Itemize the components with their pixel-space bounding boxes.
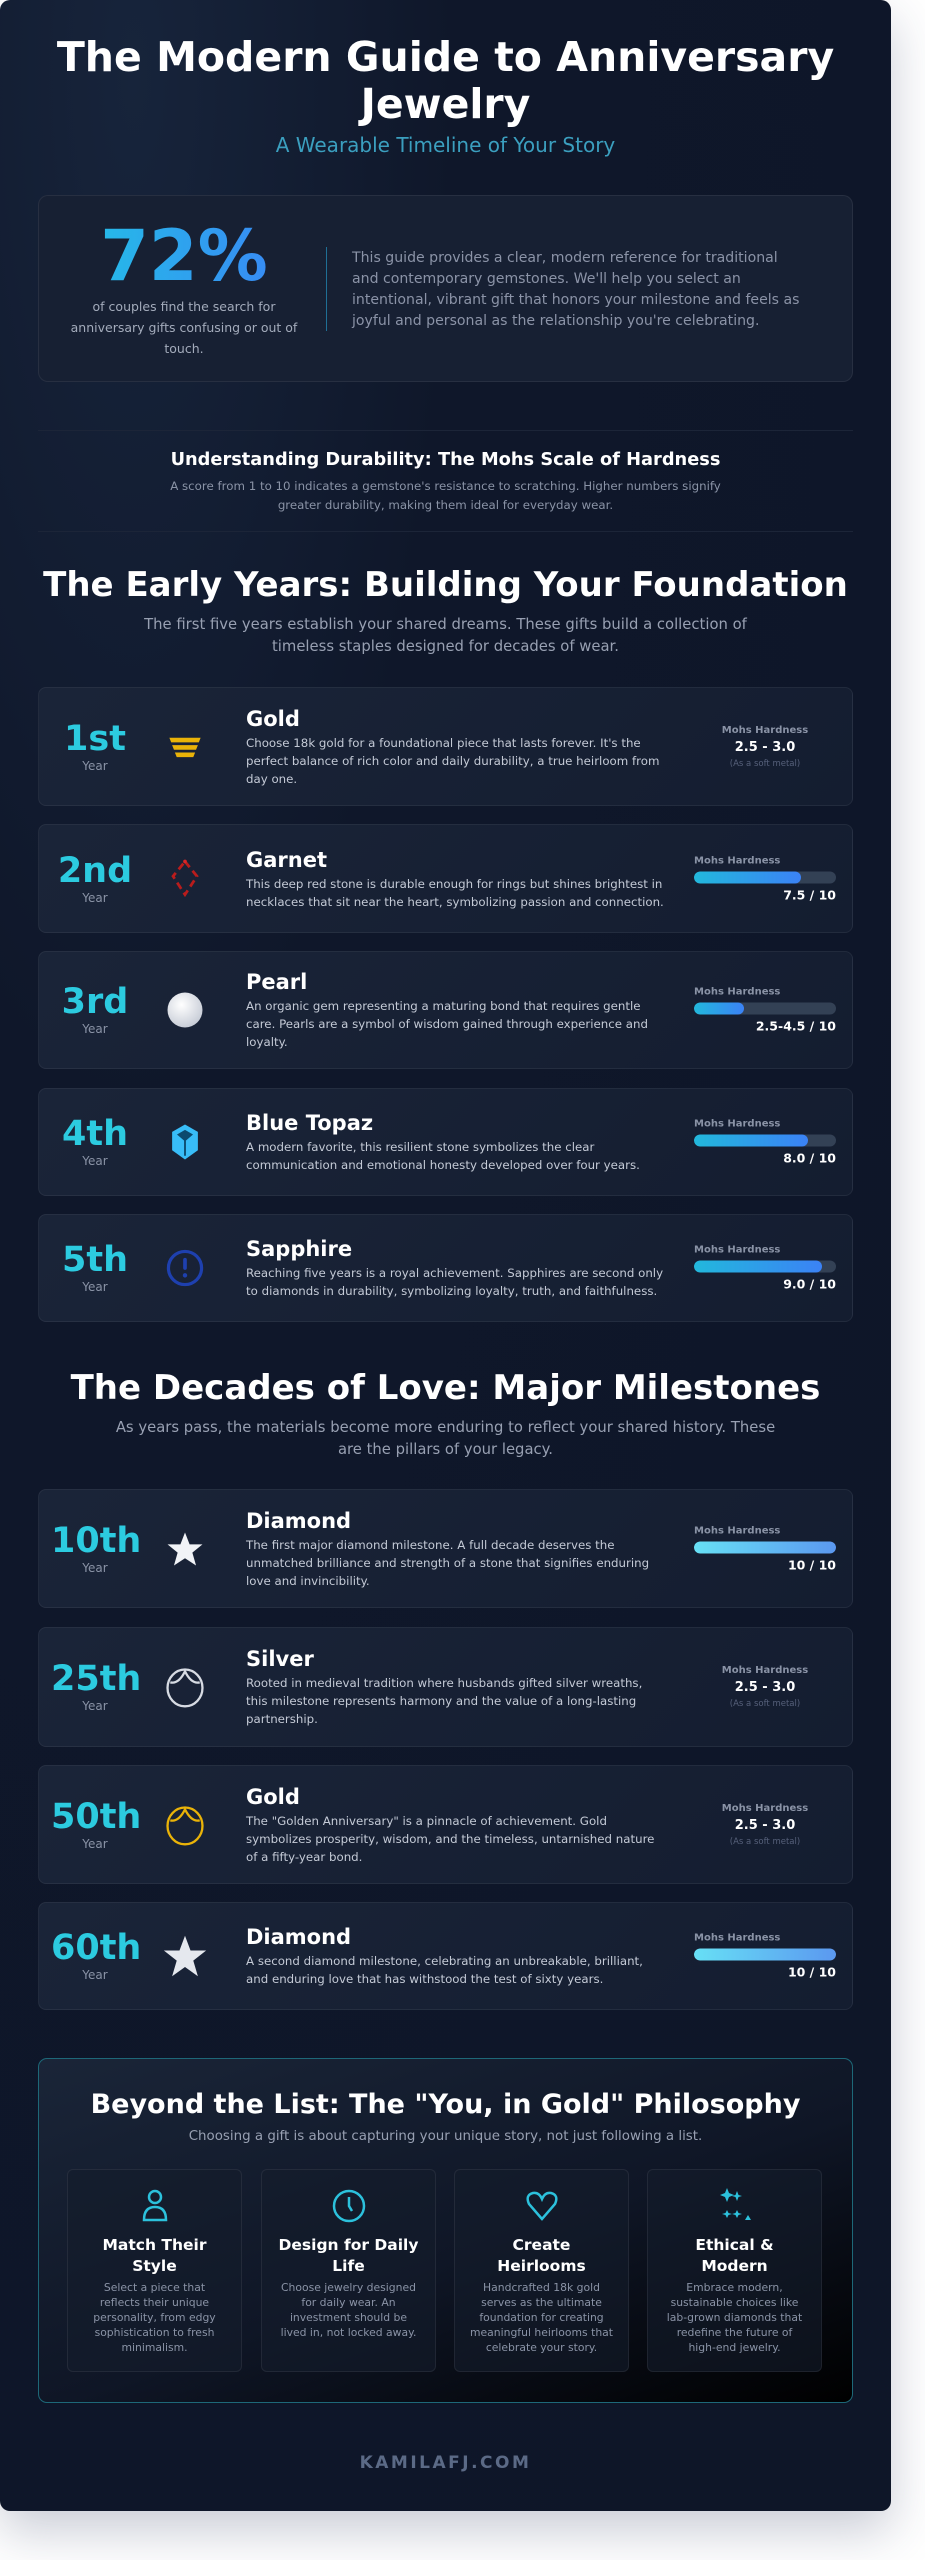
card: 1st gold: day one. (246, 772, 297, 786)
card: 3rd pearl: Pearl (246, 970, 307, 994)
subtitle: A Wearable Timeline of Your Story (276, 133, 615, 157)
card: 60th diamond: 10 / 10 (788, 1964, 836, 1980)
card: 4th blue topaz: Mohs Hardness (694, 1118, 780, 1130)
card: daily life: Design for Daily Life (279, 2236, 418, 2275)
card: match style (67, 2169, 242, 2372)
card: 25th silver: Silver (246, 1647, 314, 1671)
card: heirlooms: Handcrafted 18k gold (483, 2281, 600, 2294)
card: 2nd garnet: This deep red stone is durable enough for rings but shines brightest in (246, 876, 662, 890)
panel: philosophy (38, 2058, 853, 2403)
stat number (61, 214, 307, 298)
card: 4th blue topaz: communication and emotional honesty developed over four years. (246, 1158, 640, 1172)
card: 25th silver: 2.5 - 3.0 (735, 1680, 795, 1695)
card: 60th diamond: 60th (51, 1928, 141, 1968)
card: 1st gold (38, 687, 853, 806)
heading: early years: The Early Years: Building Your Foundation (43, 565, 848, 605)
card: 10th diamond: Diamond (246, 1508, 351, 1532)
card: match style: minimalism. (121, 2341, 188, 2354)
icon: sapphire (166, 1250, 204, 1286)
title (57, 33, 834, 128)
card: 3rd pearl (38, 951, 853, 1069)
card: 25th silver: this milestone represents harmony and the value of a long-lasting (246, 1694, 636, 1708)
intro text: intentional, vibrant gift that honors your milestone and feels as (352, 292, 799, 308)
card: ethical: sustainable choices like (671, 2296, 798, 2309)
card: 3rd pearl: An organic gem representing a maturing bond that requires gentle (246, 999, 641, 1013)
card: ethical: Embrace modern, (686, 2281, 783, 2294)
intro text: and contemporary gemstones. We'll help you select an (352, 271, 741, 287)
card: 5th sapphire (38, 1214, 853, 1322)
card: 5th sapphire: Sapphire (246, 1237, 352, 1261)
decades intro: are the pillars of your legacy. (338, 1441, 553, 1458)
card: 10th diamond: Year (82, 1560, 108, 1574)
card: 25th silver: Mohs Hardness (722, 1665, 808, 1676)
mohs explanation (170, 449, 721, 512)
card: 60th diamond: Year (82, 1968, 108, 1982)
intro text: joyful and personal as the relationship you're celebrating. (352, 313, 760, 329)
card: 1st gold: Choose 18k gold for a foundational piece that lasts forever. It's the (246, 736, 641, 750)
card: 2nd garnet: necklaces that sit near the heart, symbolizing passion and connection. (246, 894, 664, 908)
card: 1st gold: Year (82, 758, 108, 772)
card: 60th diamond: and enduring love that has withstood the test of sixty years. (246, 1972, 603, 1986)
title: Jewelry (361, 80, 530, 128)
philosophy title: Beyond the List: The "You, in Gold" Philosophy (91, 2089, 800, 2120)
early years intro: timeless staples designed for decades of wear. (272, 638, 619, 655)
early years intro: The first five years establish your shared dreams. These gifts build a collection of (144, 616, 747, 633)
card: 2nd garnet: Year (82, 890, 108, 904)
card: 10th diamond: unmatched brilliance and strength of a stone that signifies enduring (246, 1556, 649, 1570)
mohs explanation: greater durability, making them ideal for everyday wear. (278, 498, 613, 512)
card: 4th blue topaz (38, 1088, 853, 1196)
card: daily life: lived in, not locked away. (281, 2326, 416, 2339)
title: The Modern Guide to Anniversary (57, 33, 834, 81)
card: 50th gold: symbolizes prosperity, wisdom, and the timeless, untarnished nature (246, 1832, 654, 1846)
card: 1st gold: 1st (64, 718, 126, 758)
card: match style: reflects their unique (100, 2296, 209, 2309)
card: 5th sapphire: Year (82, 1280, 108, 1294)
card: heirlooms: foundation for creating (479, 2311, 604, 2324)
card: 60th diamond: A second diamond milestone, celebrating an unbreakable, brilliant, (246, 1954, 643, 1968)
card: 10th diamond: Mohs Hardness (694, 1525, 780, 1536)
card: 3rd pearl: loyalty. (246, 1035, 288, 1049)
icon: star (168, 1532, 202, 1566)
early years intro (144, 616, 748, 655)
card: daily life: Choose jewelry designed (281, 2281, 416, 2294)
card: 3rd pearl: care. Pearls are a symbol of wisdom gained through experience and (246, 1017, 648, 1031)
card: ethical: Ethical & Modern (695, 2236, 774, 2275)
icon: gold bars (169, 738, 201, 758)
card: 50th gold: Mohs Hardness (722, 1802, 808, 1814)
stat caption: of couples find the search for anniversary gifts confusing or out of touch. (71, 299, 297, 356)
heading: decades: The Decades of Love: Major Milestones (71, 1368, 820, 1408)
icon: silver ring (166, 1668, 204, 1708)
card: 1st gold: Mohs Hardness (722, 724, 808, 736)
card: heirlooms: Create Heirlooms (497, 2236, 586, 2275)
card: 4th blue topaz: 4th (62, 1114, 128, 1154)
card: daily life (261, 2169, 436, 2372)
card: 50th gold: Gold (246, 1784, 300, 1808)
mohs explanation: Understanding Durability: The Mohs Scale of Hardness (171, 449, 720, 470)
card: 25th silver: partnership. (246, 1712, 318, 1726)
card: 4th blue topaz: Blue Topaz (246, 1111, 373, 1135)
card: heirlooms: meaningful heirlooms that (470, 2326, 613, 2339)
card: 25th silver: Rooted in medieval tradition where husbands gifted silver wreaths, (246, 1676, 642, 1690)
card: daily life: for daily wear. An (301, 2296, 396, 2309)
card: 10th diamond: 10 / 10 (788, 1557, 836, 1572)
card: 60th diamond: Mohs Hardness (694, 1932, 780, 1944)
card: match style: sophistication to fresh (95, 2326, 214, 2339)
card: 25th silver (38, 1627, 853, 1747)
card: 3rd pearl: 3rd (62, 982, 128, 1022)
card: 1st gold: (As a soft metal) (730, 758, 800, 768)
card: ethical (647, 2169, 822, 2372)
card: heirlooms: serves as the ultimate (481, 2296, 602, 2309)
intro text: This guide provides a clear, modern reference for traditional (352, 250, 778, 266)
card: 25th silver: (As a soft metal) (730, 1699, 800, 1709)
card: 5th sapphire: to diamonds in durability, symbolizing loyalty, truth, and faithfulness. (246, 1284, 657, 1298)
card: daily life: investment should be (290, 2311, 407, 2324)
card: 60th diamond (38, 1902, 853, 2010)
card: 50th gold (38, 1765, 853, 1884)
mohs explanation: A score from 1 to 10 indicates a gemstone's resistance to scratching. Higher numbers signify (170, 479, 721, 493)
card: 4th blue topaz: Year (82, 1154, 108, 1168)
card: 10th diamond (38, 1489, 853, 1608)
card: 10th diamond: love and invincibility. (246, 1574, 370, 1588)
card: 10th diamond: The first major diamond milestone. A full decade deserves the (246, 1538, 614, 1552)
card: 3rd pearl: 2.5-4.5 / 10 (756, 1018, 836, 1034)
card: 1st gold: 2.5 - 3.0 (735, 740, 795, 754)
card: 5th sapphire: 5th (62, 1240, 128, 1280)
card: 50th gold: The "Golden Anniversary" is a pinnacle of achievement. Gold (246, 1814, 607, 1828)
card: 2nd garnet (38, 824, 853, 933)
card: 50th gold: of a fifty-year bond. (246, 1850, 362, 1864)
stat number: 72% (100, 215, 268, 297)
card: match style: Match Their Style (102, 2236, 206, 2275)
card: 2nd garnet: Mohs Hardness (694, 855, 780, 866)
card: 5th sapphire: Mohs Hardness (694, 1244, 780, 1256)
icon: gold ring (166, 1806, 204, 1846)
card: 25th silver: 25th (51, 1659, 141, 1699)
card: ethical: redefine the future of (677, 2326, 792, 2339)
card: ethical: lab-grown diamonds that (667, 2311, 802, 2324)
footer: KAMILAFJ.COM (360, 2453, 531, 2473)
card: 25th silver: Year (82, 1699, 108, 1713)
card: 50th gold: Year (82, 1836, 108, 1850)
intro text (352, 250, 799, 329)
card: 4th blue topaz: 8.0 / 10 (783, 1150, 836, 1166)
philosophy subtitle: Choosing a gift is about capturing your unique story, not just following a list. (189, 2129, 702, 2144)
card: ethical: high-end jewelry. (688, 2341, 781, 2354)
card: 50th gold: 2.5 - 3.0 (735, 1818, 795, 1832)
card: heirlooms (454, 2169, 629, 2372)
card: 1st gold: Gold (246, 706, 300, 730)
card: 60th diamond: Diamond (246, 1925, 351, 1949)
card: 10th diamond: 10th (51, 1520, 141, 1560)
card: 2nd garnet: 2nd (58, 850, 132, 890)
decades intro (116, 1419, 775, 1458)
card: 50th gold: 50th (51, 1796, 141, 1836)
icon: blue topaz (172, 1124, 198, 1160)
icon: large star (164, 1936, 206, 1976)
card: 5th sapphire: Reaching five years is a royal achievement. Sapphires are second only (246, 1266, 663, 1280)
card: 1st gold: perfect balance of rich color and daily durability, a true heirloom from (246, 754, 659, 768)
icon: garnet (171, 860, 199, 897)
card: heirlooms: celebrate your story. (486, 2341, 597, 2354)
card: match style: personality, from edgy (93, 2311, 216, 2324)
card: 5th sapphire: 9.0 / 10 (783, 1276, 836, 1292)
icon: pearl (168, 992, 202, 1028)
card: 3rd pearl: Mohs Hardness (694, 986, 780, 998)
card: 4th blue topaz: A modern favorite, this resilient stone symbolizes the clear (246, 1140, 594, 1154)
decades intro: As years pass, the materials become more enduring to reflect your shared history. These (116, 1419, 775, 1436)
card: 2nd garnet: Garnet (246, 848, 327, 872)
card: match style: Select a piece that (104, 2281, 205, 2294)
card: 50th gold: (As a soft metal) (730, 1836, 800, 1846)
stat panel (38, 195, 853, 382)
card: 2nd garnet: 7.5 / 10 (783, 887, 836, 902)
card: 3rd pearl: Year (82, 1022, 108, 1036)
